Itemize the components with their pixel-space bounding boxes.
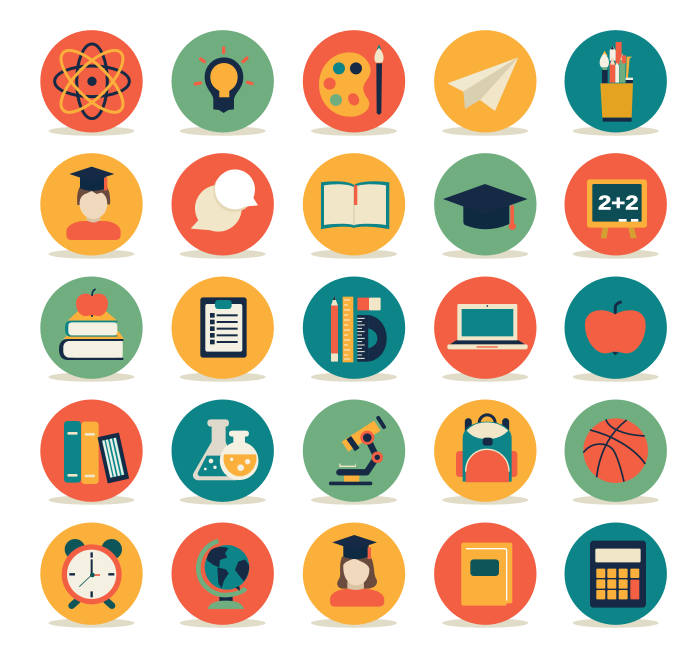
icon: female graduate [303,522,405,628]
icon: alarm clock [40,522,143,628]
icon: books with apple [40,276,143,382]
icon: globe [172,522,274,628]
icon: apple [564,276,667,382]
icon: light bulb [172,30,274,136]
icon: notebook [434,522,536,628]
icon: basketball [564,400,667,505]
icon: microscope [303,400,405,505]
icon: speech bubbles [172,153,274,259]
icon: blackboard: 2+2 [598,193,639,215]
icon: clipboard [172,276,274,382]
icon: calculator [564,522,667,628]
icon: atom [40,30,143,136]
icon: open book [303,153,405,259]
icon: blackboard [564,153,667,259]
icon: chemistry flasks [172,400,274,505]
icon: paper plane [434,30,536,136]
icon: backpack [434,400,536,505]
icon: laptop [434,276,536,382]
icon: row of books [40,400,143,505]
icon: graduation cap [434,153,536,259]
icon: pencil cup [564,30,667,136]
icon: paint palette [303,30,405,136]
icon: male graduate [40,153,143,259]
icon: rulers and pencil [303,276,405,382]
